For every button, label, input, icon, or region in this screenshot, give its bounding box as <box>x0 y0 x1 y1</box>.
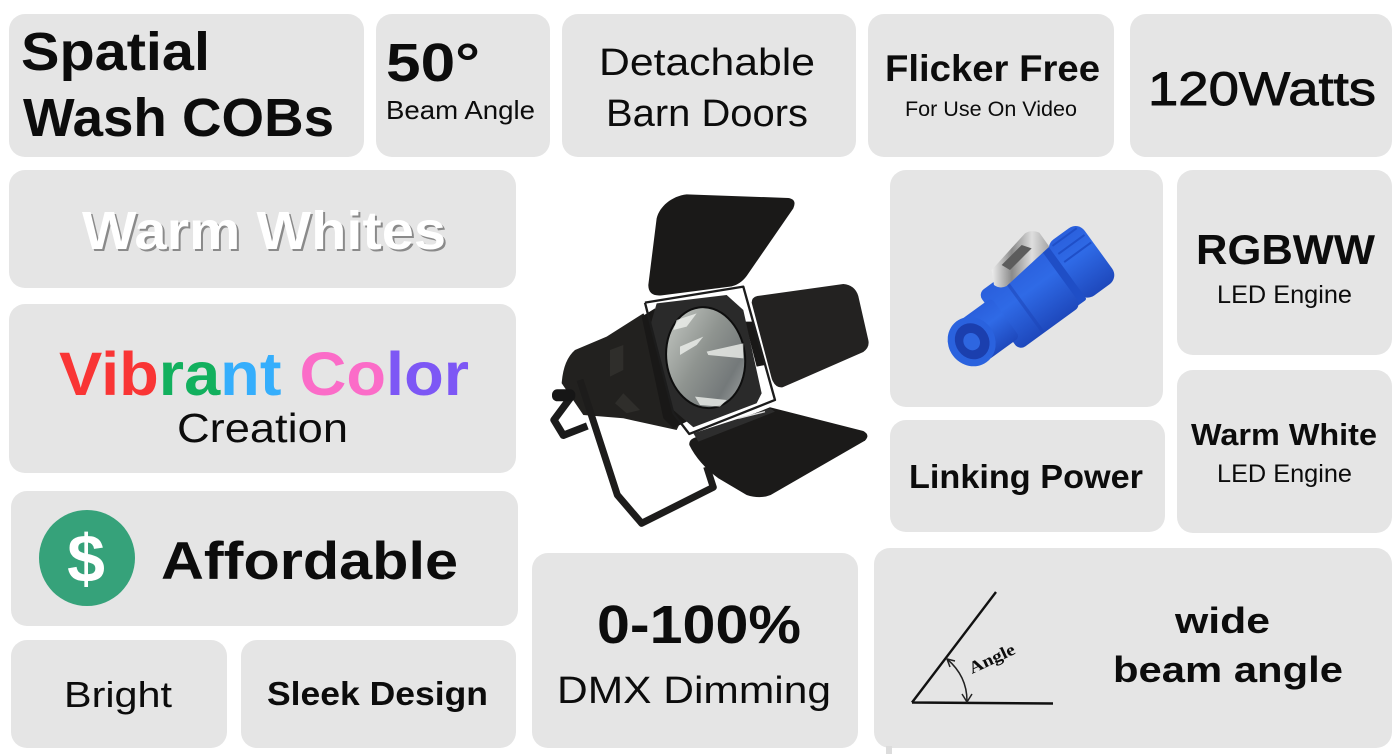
front plate <box>650 295 762 427</box>
panel: beam angle <box>376 14 550 157</box>
text: 120 Watts: 120Watts <box>1148 62 1376 115</box>
fixture body <box>562 313 690 430</box>
illustration: stage light with barn doors <box>552 194 869 523</box>
door: right <box>752 284 869 387</box>
text: Creation: Creation <box>177 405 348 451</box>
text: Bright: Bright <box>64 674 172 715</box>
text: LED engine: LED Engine <box>1217 281 1352 309</box>
panel: power connector <box>890 170 1163 407</box>
heading: RGBWW: RGBWW <box>1196 226 1375 273</box>
label: beam angle: Beam Angle <box>386 95 535 125</box>
text: for use on video: For Use On Video <box>905 98 1077 121</box>
mounting knob <box>552 389 575 401</box>
text: Sleek Design: Sleek Design <box>267 675 488 712</box>
icon: dollar coin <box>39 510 135 606</box>
heading: Vibrant Color: Vibrant Color <box>59 340 469 408</box>
panel: wattage <box>1130 14 1392 157</box>
lens <box>660 302 752 413</box>
panel: sleek design <box>241 640 516 748</box>
yoke front arm <box>580 380 713 523</box>
text: DMX Dimming: DMX Dimming <box>557 670 831 712</box>
panel: linking power <box>890 420 1165 532</box>
panel: warm whites <box>9 170 516 288</box>
yoke back arm <box>554 385 587 435</box>
panel: warm white engine <box>1177 370 1392 533</box>
value: 0-100%: 0-100% <box>597 595 801 655</box>
frame wire <box>645 287 775 434</box>
hinge strip <box>693 408 775 442</box>
diagram: angle <box>912 592 1053 704</box>
heading: Affordable: Affordable <box>161 532 458 591</box>
panel: flicker free <box>868 14 1114 157</box>
text: wide: wide <box>1174 600 1270 641</box>
panel: dmx dimming <box>532 553 858 748</box>
icon: blue powercon connector <box>932 221 1119 384</box>
panel: vibrant color <box>9 304 516 473</box>
heading: Warm Whites with shadow: Warm Whites <box>82 201 446 261</box>
door: bottom <box>689 407 867 497</box>
panel: affordable <box>11 491 518 626</box>
panel: wide beam angle <box>874 548 1392 754</box>
text: Detachable: Detachable <box>599 42 815 84</box>
heading: Spatial: Spatial <box>21 22 210 82</box>
value: 50 degrees: 50° <box>386 33 480 93</box>
text: beam angle: beam angle <box>1113 649 1343 690</box>
heading: Warm White: Warm White <box>1191 417 1377 452</box>
text: Barn Doors: Barn Doors <box>606 93 808 135</box>
heading: Wash COBs: Wash COBs <box>23 88 334 148</box>
heading: Flicker Free: Flicker Free <box>885 48 1100 89</box>
panel: rgbww <box>1177 170 1392 355</box>
label: Angle: Angle <box>966 639 1019 678</box>
icon: dollar coin: $ <box>67 521 105 597</box>
panel: barn doors <box>562 14 856 157</box>
door: top <box>648 194 795 295</box>
panel: bright <box>11 640 227 748</box>
side band and bracket <box>642 308 765 428</box>
panel: title <box>9 14 364 157</box>
text: Linking Power: Linking Power <box>909 458 1143 495</box>
text: LED engine: LED Engine <box>1217 460 1352 488</box>
